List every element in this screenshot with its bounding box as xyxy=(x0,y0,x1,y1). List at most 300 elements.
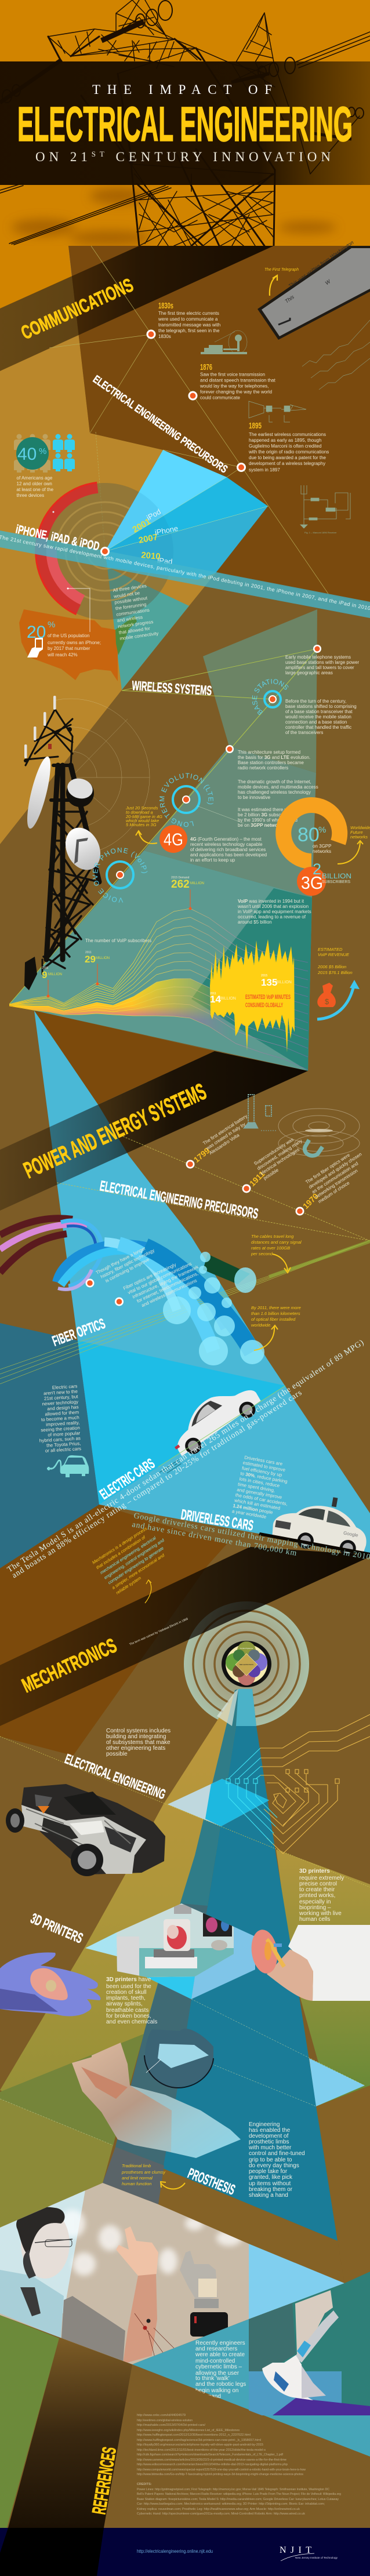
text: mechatronics definition: computer engineering to generate xyxy=(107,1546,165,1585)
footer url: http://electricalengineering.online.njit.edu xyxy=(137,2548,213,2554)
text: base stations: large geographic areas xyxy=(285,670,333,675)
reference links: http://www.computerworld.com/news/special-report/2257529-one-day-you-will-control-a-robotic-hand-with-your-brain-here-is-how xyxy=(137,2468,306,2472)
image credits: Cybernetic Hand: http://spectrumieee-com/gues2011a-mostly.com; Mind-Controlled Robotic Arm: http://www.wired.co.uk xyxy=(137,2512,305,2516)
callout: 4G download time xyxy=(125,805,162,844)
note: term coined: The term was coined by Yaskawa Electric in 1969 xyxy=(129,1618,188,1647)
timeline 1830s xyxy=(146,301,220,339)
text: VoIP history: The number of VoIP subscribers xyxy=(85,938,151,943)
text: google driverless: and have since driven more than 700,000 km xyxy=(131,1520,298,1558)
callout: 4G download time: 20-MB game in 4G xyxy=(125,814,162,819)
VoIP node: VOICE OVER PHONE (VoIP) xyxy=(93,848,147,903)
callout: cable signal rates xyxy=(251,1234,302,1273)
timeline 1799: The first electrical battery xyxy=(202,1113,248,1146)
reference links: http://www.huffingtonpost.com/tag/science/3d-printers-can-now-print-_b_1958657.html xyxy=(137,2439,261,2442)
callout: cable signal rates: The cables travel long xyxy=(251,1234,294,1239)
heading: references: REFERENCES xyxy=(88,2446,120,2516)
text: electric cars history: newer technology xyxy=(42,1399,78,1407)
callout: worldwide future networks xyxy=(338,825,370,864)
text: fiber optics: is continuing to improve xyxy=(104,1257,150,1284)
wave chart: VoIP subscribers: 2006 xyxy=(42,967,48,970)
text: VoIP history: in VoIP app and equipment markets xyxy=(238,909,311,914)
text: driverless benefits: a year worldwide xyxy=(231,1509,267,1520)
device ownership: concentric signal rings xyxy=(37,483,173,620)
callout: the first telegraph xyxy=(264,267,299,296)
mechatronics venn diagram: MECHATRONICS xyxy=(240,1663,253,1666)
text: driverless benefits: Driverless cars are xyxy=(244,1455,283,1467)
arrow: mechatronics note xyxy=(145,1580,151,1603)
text: control systems: other engineering feats xyxy=(106,1745,165,1752)
mechatronics section: golden and blue rays xyxy=(0,1689,370,2553)
text: mind-controlled limbs: and the robotic legs xyxy=(195,2381,246,2388)
4G stat: recent wireless technology capable xyxy=(190,842,263,847)
band: power and energy systems xyxy=(0,1051,308,1211)
text: mechatronics definition: reliable system xyxy=(115,1575,142,1596)
text: electric cars history: 21st century, but xyxy=(44,1394,79,1401)
heading: 3D printers: 3D PRINTERS xyxy=(28,1910,85,1947)
image credits: Kidney replica: nouvelman.com; Prosthetic Leg: http://healthcaresnews.wbur.org; Arm Muscle: http://onlinewired.co.uk xyxy=(137,2508,300,2511)
logo: NJIT xyxy=(280,2545,338,2561)
wave chart: VoIP subscribers: 9 xyxy=(42,969,47,980)
text: mechatronics definition: engineering, control engineering and xyxy=(103,1537,165,1581)
section background: communications xyxy=(0,246,370,1071)
donut: 80 percent on 3GPP: 80 xyxy=(298,824,320,846)
text: base stations: would receive the mobile station xyxy=(285,714,351,720)
text: driverless benefits: fuel efficiency by up xyxy=(241,1466,283,1478)
waveform chart: VoIP minutes: ESTIMATED VoIP MINUTES xyxy=(245,994,291,1001)
stat: 40 percent: at least one of the xyxy=(16,487,54,492)
image credits xyxy=(137,2483,341,2516)
text: electric cars history: improved reality, xyxy=(46,1420,79,1427)
timeline 1970: 1970 xyxy=(301,1191,320,1211)
stat: 20 percent xyxy=(27,588,101,657)
icon: radio wave sketches xyxy=(302,320,370,390)
text: prosthetic limbs: people take for xyxy=(249,2168,288,2175)
text: prosthetic limbs: breaking them or xyxy=(249,2186,293,2193)
text: driverless benefits: lots in cities, reduce xyxy=(239,1476,280,1488)
timeline 1830s: The first time electric currents xyxy=(158,311,219,316)
red arc: 40 percent ownership xyxy=(41,488,97,610)
text: electric cars history xyxy=(36,1383,82,1454)
stat: 40 percent: of Americans age xyxy=(16,475,53,481)
text: mind-controlled limbs: begin walking on xyxy=(195,2388,239,2394)
wave chart: VoIP subscribers: 262 xyxy=(171,878,190,891)
timeline 1911: discovered, making many xyxy=(256,1138,303,1171)
text: mind-controlled limbs: cybernetic limbs – xyxy=(195,2364,242,2370)
icon: plug-in car xyxy=(47,1455,89,1477)
photo: glove holding printed ear xyxy=(0,1952,100,2016)
timeline 1895: due to being awarded a patent for the xyxy=(249,455,327,460)
4G stat: 4G xyxy=(164,830,183,849)
dashed line through prosthesis xyxy=(0,1999,365,2145)
reference links: http://techland.time.com/2012/11/01/best-inventions-of-the-year-2012/slide/the-tesla-model-s xyxy=(137,2448,266,2452)
text: base stations xyxy=(285,655,360,735)
stat: 20 percent: of the US population xyxy=(48,633,89,638)
text: prosthetic limbs: prosthetic limbs xyxy=(249,2139,289,2145)
title: THE IMPACT OF xyxy=(92,82,272,97)
icon: magnet field rings xyxy=(278,1109,360,1156)
text: prosthetic limbs: Engineering xyxy=(249,2121,280,2128)
revenue callout: ESTIMATED xyxy=(318,947,343,952)
text: VoIP history xyxy=(85,899,311,943)
text: fiber optics: history, fiber optic technology xyxy=(100,1248,155,1280)
text: control systems: of subsystems that make xyxy=(106,1739,171,1746)
fan labels: device years: iPhone xyxy=(154,524,179,537)
text: devices depend on wireless: the forerunning xyxy=(115,602,147,611)
reference links: http://eeetimes.com/global-wireless-solution xyxy=(137,2419,193,2422)
text: 3D printers precision: 3D printers xyxy=(299,1868,330,1874)
timeline 1895: 1895 xyxy=(249,421,262,431)
4G stat: 4G (Fourth Generation) – the most xyxy=(190,837,262,842)
icon: marconi receiver circuit xyxy=(300,485,350,534)
text: LTE evolution: radio network controllers xyxy=(238,765,288,771)
title xyxy=(17,82,353,164)
text: VoIP history: occurred, leading to a revenue of xyxy=(238,914,306,920)
text: fiber optics: Fiber optics are increasingly xyxy=(122,1262,177,1291)
base stations node: BASE STATIONS xyxy=(252,679,289,715)
heading: mechatronics: MECHATRONICS xyxy=(19,1634,120,1697)
callout: 4G download time: to download a xyxy=(126,809,153,815)
text: electric cars history: hybrid cars, such as xyxy=(39,1436,81,1443)
wave chart: VoIP subscribers: 29 xyxy=(85,954,96,965)
timeline 1970: networking transmission xyxy=(314,1168,358,1200)
timeline 1895 xyxy=(237,421,329,473)
image credits: Bell's Patent Papers: National Archives; Marconi Radio Receiver: wikipedia.org; iPhone: Luis Prado From The Noun Project; File de Vetheuil: Wikipedia.org xyxy=(137,2493,341,2496)
text: LTE evolution: be 2 billion 3G subscribers xyxy=(238,812,292,818)
callout: worldwide future networks: Worldwide xyxy=(350,825,370,830)
icon: marconi receiver circuit: Fig. 1 – Marconi 1896 Receiver xyxy=(304,531,337,534)
text: LTE evolution: to be innovative xyxy=(238,795,271,800)
heading: power and energy systems: POWER AND ENERGY SYSTEMS xyxy=(20,1079,210,1183)
telegraph paper photo: This was written from Washington xyxy=(287,239,355,289)
timeline 1830s: 1830s xyxy=(158,334,171,339)
callout: the first telegraph: The First Telegraph xyxy=(264,267,299,272)
4G stat: in an effort to keep up xyxy=(190,858,235,863)
stat: 20 percent: currently owns an iPhone; xyxy=(48,640,101,645)
text: 3D printers precision: precise control xyxy=(299,1881,337,1887)
telegraph paper photo xyxy=(257,239,370,340)
wave chart: VoIP subscribers: 2015 Demand xyxy=(171,876,190,880)
photo: doctor holding kidney xyxy=(249,1925,370,2001)
telegraph paper photo: W xyxy=(324,278,332,286)
text: mind-controlled limbs: allowing the user xyxy=(195,2370,240,2377)
cyan fan: device timeline xyxy=(37,450,268,620)
text: base stations: base stations shifted to comprising xyxy=(285,704,357,709)
text: prosthetic limbs: do every day things xyxy=(249,2163,299,2169)
callout: worldwide future networks: Future xyxy=(350,830,363,835)
text: control systems: building and integrating xyxy=(106,1734,166,1740)
text: devices depend on wireless: mobile connectivity xyxy=(119,631,159,641)
revenue callout xyxy=(317,947,360,1019)
text: 3D printers precision: bioprinting – xyxy=(299,1905,331,1911)
callout: traditional prostheses xyxy=(121,2163,185,2189)
timeline 1876: forever changing the way the world xyxy=(200,390,272,394)
black road band: driverless xyxy=(259,1532,370,1556)
text: driverless benefits: and generally improve xyxy=(237,1487,282,1500)
text: electric cars history: the Toyota Prius, xyxy=(46,1441,81,1448)
text: LTE evolution: by the 1990's of whom would xyxy=(238,818,298,823)
google car illustration xyxy=(270,1488,370,1559)
text: mind-controlled limbs: and researchers xyxy=(195,2346,237,2352)
LTE node: LONG TERM EVOLUTION (LTE) xyxy=(159,773,213,827)
stat: 20 percent: % xyxy=(48,620,55,630)
callout: traditional prostheses: Traditional limb xyxy=(122,2163,151,2168)
text: LTE evolution: be on 3GPP networks xyxy=(238,823,285,828)
text: LTE evolution: Base station controllers became xyxy=(238,760,304,765)
fan labels: device years: 2001 xyxy=(131,517,153,535)
reference links: http://mashable.com/2013/07/04/3d-printed-cars/ xyxy=(137,2424,206,2427)
image credits: Base Station diagram: freepictureskine.com; Tesla Model S: http://media.caranddriver.com; Google Driverless Car: luxurylaunches; Lotus Cutaway xyxy=(137,2498,339,2501)
text: mind-controlled limbs: to think 'walk' xyxy=(195,2375,230,2382)
chassis car photo xyxy=(6,1784,165,1876)
icon: voltaic pile sketches xyxy=(244,1095,276,1131)
callout: 4G download time: which would take xyxy=(126,818,159,823)
text: LTE evolution: It was estimated there would xyxy=(238,807,296,812)
text: driverless benefits xyxy=(231,1454,295,1523)
timeline 1799 xyxy=(186,1113,255,1169)
callout: 4G download time: Just 20 Seconds xyxy=(125,805,158,811)
donut: 80 percent on 3GPP: on 3GPP xyxy=(313,844,331,849)
callout: cable signal rates: rates at over 100GB xyxy=(251,1245,290,1251)
radar rings xyxy=(55,699,150,854)
waveform chart: VoIP minutes xyxy=(210,939,295,1052)
text: electric cars history: to become a much xyxy=(41,1415,79,1422)
text: mechatronics definition: mechanical engineering, electrical xyxy=(99,1535,157,1575)
timeline 1876: and distant speech transmission that xyxy=(200,378,276,383)
stat: 40 percent: 40 xyxy=(17,445,37,464)
reference links: http://loyalty360.org/resources/article/iphone-loyalty-will-drive-apple-past-android-by-2015 xyxy=(137,2443,263,2447)
heading: wireless systems: WIRELESS SYSTEMS xyxy=(132,678,212,698)
image credits: Power Lines: http://gridmagnetpixel.com; First Telegraph: http://memory.loc.gov; Morse-Vail 1845 Telegraph: Smithsonian Institute, Washington DC xyxy=(137,2488,329,2491)
LTE node xyxy=(159,745,244,827)
text: tesla model s: and boasts an 88% efficiency rating – compared to 20-25% for traditional gas-powered cars xyxy=(10,1389,303,1580)
text: base stations: Early mobile telephone systems xyxy=(285,655,351,660)
header title band xyxy=(0,61,370,185)
waveform chart: VoIP minutes: 2015 xyxy=(261,974,267,978)
4G stat: and applications has been developed xyxy=(190,852,267,858)
light beam into target xyxy=(217,1689,256,1726)
power timeline line xyxy=(57,1136,370,1241)
title: CENTURY INNOVATION xyxy=(108,150,331,164)
text: 3D printed implants: been used for the xyxy=(106,1983,151,1990)
wave chart: VoIP subscribers: MILLION xyxy=(190,882,204,885)
wireless tower photo xyxy=(23,696,107,990)
text: VoIP history: around $5 billion xyxy=(238,920,272,925)
text: driverless benefits: 1.24 million people xyxy=(233,1503,274,1516)
text: google driverless: Google driverless cars utilized their mapping technology in 2010 xyxy=(133,1512,370,1562)
waveform chart: VoIP minutes: CONSUMED GLOBALLY xyxy=(245,1002,283,1009)
wireless lines xyxy=(9,649,317,1004)
image credits: Car: http://www.baribegalou.com; Mechatronics workaround: wikimedia.org; 3D Printer: http://3dprinting.com; Bionic Ear: inhabitat.com; xyxy=(137,2502,325,2506)
timeline 1876: Saw the first voice transmission xyxy=(200,372,265,377)
timeline 1830s: were used to communicate a xyxy=(158,317,218,322)
text: 3D printers precision: human cells xyxy=(299,1916,330,1923)
timeline 1799: was created in Italy by xyxy=(205,1121,246,1151)
stat: 20 percent: 20 xyxy=(27,623,46,642)
text: electric cars history: of more popular xyxy=(48,1430,81,1438)
3G stat: BILLION xyxy=(322,872,351,880)
title: ST xyxy=(92,150,104,158)
illustration: prosthetic arm xyxy=(72,2043,241,2158)
text: 3D printed implants: airway splints, xyxy=(106,2001,143,2007)
text: devices depend on wireless xyxy=(112,583,159,641)
timeline 1911: 1911 xyxy=(248,1169,267,1188)
fan labels: device years: iPod xyxy=(145,507,162,522)
header: power tower photo xyxy=(0,0,370,246)
reference links: http://www.ieeeghn.org/wiki/index.php/Milestones:List_of_IEEE_Milestones xyxy=(137,2429,240,2432)
callout: 4G download time: 5 Minutes in 3G xyxy=(126,822,157,827)
text: devices depend on wireless: possible without xyxy=(114,595,148,605)
text: tesla model s: The Tesla Model S is an all-electric 4-door sedan that can travel 265 miles on 1 charge (the equivalent of 89 MPG) xyxy=(6,1338,365,1574)
timeline 1876 xyxy=(188,362,276,400)
text: prosthetic limbs: grip to be able to xyxy=(249,2157,292,2163)
timeline 1911 xyxy=(242,1133,310,1193)
callout: installed optical fiber xyxy=(251,1305,301,1350)
wave chart: VoIP subscribers xyxy=(9,876,308,1070)
text: devices depend on wireless: would not be xyxy=(113,590,140,600)
timeline 1830s: 1830s xyxy=(158,301,173,311)
text: base stations: amplifiers and tall towers to cover xyxy=(285,665,354,670)
stat: 40 percent xyxy=(14,434,75,498)
text: electric cars history: aren't new to the xyxy=(43,1389,78,1396)
hexagon: bioprinting xyxy=(85,1903,255,1999)
text: electric cars history: seeing the creation xyxy=(41,1425,80,1433)
text: prosthetic limbs: shaking a hand xyxy=(249,2192,288,2199)
fan labels: device years xyxy=(131,507,179,566)
icon: telephone patent drawing xyxy=(249,401,306,422)
3G stat: SUBSCRIBERS xyxy=(322,879,350,884)
timeline 1895: with the origin of radio communications xyxy=(248,449,329,455)
timeline 1970: The first fiber optics were xyxy=(304,1152,351,1185)
heading: iPhone, iPad and iPod: iPHONE, iPAD & iPOD xyxy=(14,522,101,553)
text: driverless benefits: estimated to improve xyxy=(242,1460,286,1473)
text: LTE evolution: The dramatic growth of the Internet, xyxy=(238,779,311,784)
timeline 1895: happened as early as 1895, though xyxy=(249,438,321,443)
text: 3D printed implants: implants, teeth, xyxy=(106,1995,146,2001)
heading: electrical engineering, mechatronics: ELECTRICAL ENGINEERING xyxy=(63,1751,168,1803)
text: 3D printed implants: and even chemicals xyxy=(106,2019,157,2025)
timeline 1876: 1876 xyxy=(200,362,212,372)
waveform chart: VoIP minutes: 2011 xyxy=(210,992,216,995)
logo: NJIT: New Jersey Institute of Technology xyxy=(295,2556,338,2559)
timeline 1970 xyxy=(296,1147,370,1215)
text: LTE evolution: the basis for 3G and LTE evolution. xyxy=(238,755,310,760)
text: prosthetic limbs: granted, like pick xyxy=(249,2174,293,2181)
google car illustration: Google xyxy=(343,1530,359,1538)
timeline 1799: Alessandro Volta xyxy=(208,1132,241,1156)
wave chart: VoIP subscribers: 2011 xyxy=(85,951,92,954)
text: mind-controlled limbs xyxy=(195,2340,246,2400)
waveform chart: VoIP minutes: 135 xyxy=(261,977,277,988)
timeline 1895: The earliest wireless communications xyxy=(249,432,326,437)
donut: 80 percent on 3GPP xyxy=(284,805,340,862)
reference links: http://www.cnbc.com/id/44004579 xyxy=(137,2414,186,2417)
text: mind-controlled limbs: Recently engineers xyxy=(195,2340,245,2346)
heading: prosthesis: PROSTHESIS xyxy=(186,2166,237,2199)
icon: telegraph key xyxy=(201,330,247,354)
reference links xyxy=(137,2414,306,2476)
text: electric cars history: allowed for them xyxy=(45,1409,79,1417)
timeline 1830s: the telegraph, first seen in the xyxy=(158,328,220,333)
text: electric cars history: Electric cars xyxy=(52,1383,78,1390)
text: base stations: Before the turn of the century, xyxy=(285,699,346,704)
text: base stations: connection and a base station xyxy=(285,720,347,725)
timeline 1970: medium of choice xyxy=(317,1180,351,1204)
text: 3D printed implants: breathable casts xyxy=(106,2007,148,2014)
power section: cyan ray and triangles xyxy=(0,1011,370,1756)
revenue callout: $ xyxy=(325,997,329,1006)
text: LTE evolution: has challenged wireless technology xyxy=(238,790,311,795)
text: devices depend on wireless: communications xyxy=(116,608,150,617)
callout: cable signal rates: distances and carry signal xyxy=(251,1240,302,1245)
callout: installed optical fiber: of optical fiber installed xyxy=(251,1317,296,1322)
green fiber lines xyxy=(0,1241,370,1384)
text: 3D printers precision: working with live xyxy=(299,1910,342,1917)
heading: driverless cars: DRIVERLESS CARS xyxy=(180,1506,255,1534)
teal panel and leg photo xyxy=(132,2272,370,2457)
donut: 80 percent on 3GPP: networks xyxy=(313,849,331,854)
illustration: bionic implant xyxy=(144,2029,213,2088)
stat: 20 percent: will reach 42% xyxy=(47,652,78,657)
callout: traditional prostheses: human function xyxy=(122,2181,151,2186)
callout: installed optical fiber: By 2011, there were more xyxy=(251,1305,301,1310)
stat: 20 percent: by 2017 that number xyxy=(48,646,90,651)
timeline 1895: Guglielmo Marconi is often credited xyxy=(249,444,321,449)
callout: traditional prostheses: prostheses are clumsy xyxy=(121,2170,166,2175)
text: VoIP history: VoIP was invented in 1994 but it xyxy=(238,899,304,904)
light diamond xyxy=(168,1779,269,1826)
stat: 40 percent: three devices xyxy=(16,493,44,498)
text: mind-controlled limbs: mind-controlled xyxy=(195,2358,235,2364)
fan labels: device years: iPad xyxy=(157,556,173,566)
text: control systems: possible xyxy=(106,1751,128,1757)
waveform chart: VoIP minutes: BILLION xyxy=(220,997,236,1001)
text: prosthetic limbs: control and fine-tuned xyxy=(249,2150,305,2157)
text: base stations: of a base station transceiver that xyxy=(285,709,353,714)
title: ON 21 xyxy=(35,150,88,164)
text: control systems xyxy=(106,1728,171,1757)
text: devices depend on wireless: and wireless xyxy=(117,615,143,623)
timeline 1970: as the communication and xyxy=(311,1161,359,1194)
text: devices depend on wireless: that allowed for xyxy=(118,626,151,635)
timeline 1895: development of a wireless telegraphy xyxy=(249,461,325,466)
callout: worldwide future networks: networks xyxy=(350,834,368,840)
text: 3D printers precision: especially in xyxy=(299,1899,331,1905)
text: 3D printers precision: to create their xyxy=(299,1887,335,1893)
mechatronics venn diagram xyxy=(222,1641,271,1687)
4G stat: of delivering rich broadband services xyxy=(190,847,266,852)
waveform chart: VoIP minutes: BILLION xyxy=(276,980,292,984)
timeline 1895: system in 1897 xyxy=(249,467,280,473)
text: fiber optics: vital to our global communications xyxy=(127,1261,193,1295)
text: 3D printed implants: 3D printers have xyxy=(106,1976,151,1983)
callout: traditional prostheses: and limit normal xyxy=(122,2175,153,2181)
fan labels: device years: 2010 xyxy=(141,550,161,562)
text: prosthetic limbs xyxy=(248,2121,305,2199)
text: base stations: controller that handled the traffic xyxy=(285,725,351,730)
revenue callout: 2006 $5 Billion xyxy=(317,964,346,969)
reference links: http://www.huffingtonpost.com/2012/12/30/best-inventions-2012_n_2237022.html xyxy=(137,2433,251,2437)
text: mechatronics definition: a simpler, more economical and xyxy=(111,1552,166,1590)
timeline line xyxy=(49,246,328,594)
waveform chart: VoIP minutes: 14 xyxy=(210,994,221,1005)
text: mechatronics definition: Mechatronics is a design process xyxy=(91,1526,148,1565)
hexagon photo: mind-controlled hand xyxy=(0,2180,249,2366)
telegraph paper photo: This xyxy=(284,294,295,304)
image credits: CREDITS: xyxy=(137,2483,152,2486)
green road line xyxy=(158,1386,285,1467)
mechatronics venn diagram: Control Systems xyxy=(240,1647,253,1649)
text: mechatronics definition: that includes a combination of xyxy=(95,1534,147,1570)
